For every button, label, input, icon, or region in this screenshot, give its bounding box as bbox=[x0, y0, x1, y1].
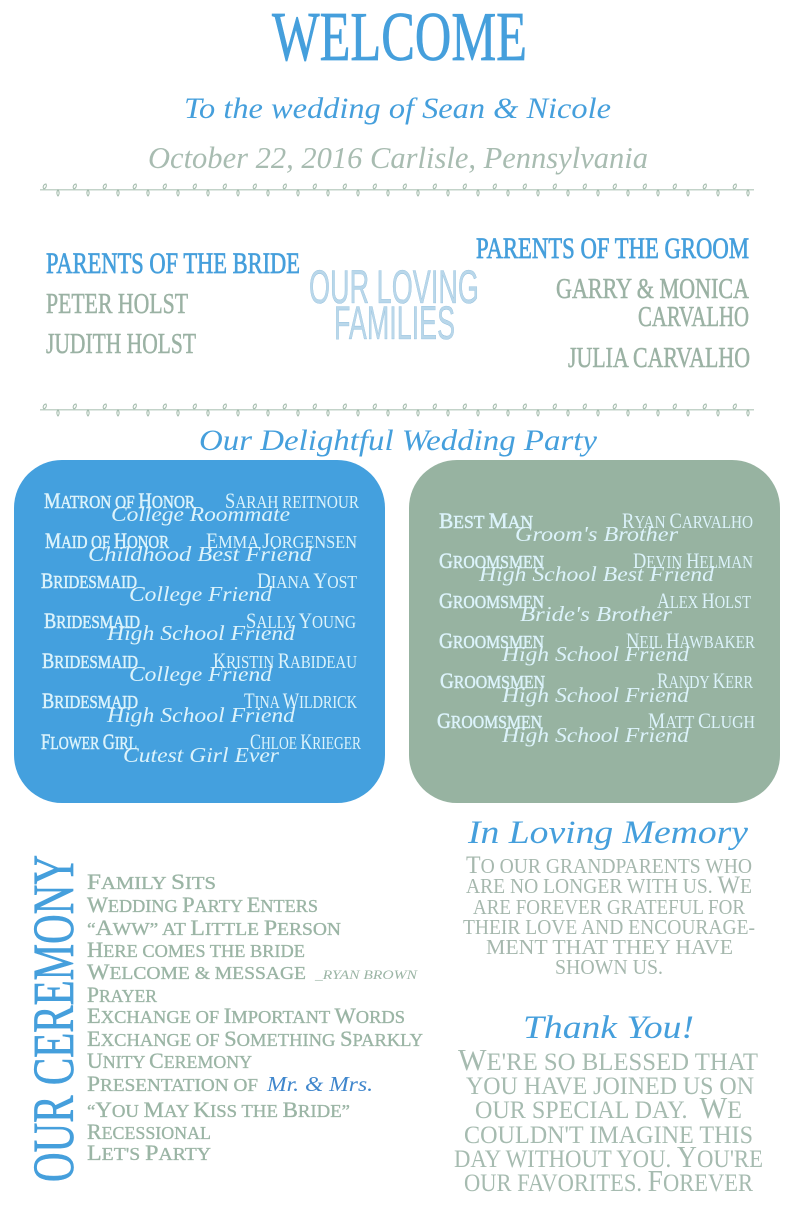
list: ceremony order: HERE COMES THE BRIDE bbox=[87, 937, 305, 962]
row: maid of honor: Childhood Best Friend bbox=[88, 542, 313, 566]
heading: our ceremony (vertical): OUR CEREMONY bbox=[21, 855, 86, 1182]
list: ceremony order: EXCHANGE OF SOMETHING SPARKLY bbox=[87, 1026, 423, 1051]
text block: thank you: OUR FAVORITES. FOREVER bbox=[464, 1164, 753, 1198]
date and place: October 22, 2016 Carlisle, Pennsylvania bbox=[148, 140, 648, 175]
panel: groomsmen bbox=[409, 460, 780, 803]
row: matron of honor: MATRON OF HONOR bbox=[44, 488, 195, 513]
list: ceremony order: WEDDING PARTY ENTERS bbox=[87, 892, 318, 917]
row: groomsman Randy Kerr: High School Friend bbox=[501, 683, 690, 707]
row: groomsman Matt Clugh bbox=[437, 708, 755, 747]
row: groomsman Devin Helman: GROOMSMEN bbox=[439, 548, 544, 573]
heading: our loving families: FAMILIES bbox=[334, 296, 455, 349]
list: ceremony order: PRAYER bbox=[87, 982, 157, 1007]
row: maid of honor: EMMA JORGENSEN bbox=[206, 528, 357, 553]
list: ceremony order bbox=[87, 869, 423, 1165]
row: matron of honor bbox=[44, 488, 359, 526]
text block: thank you: YOU HAVE JOINED US ON bbox=[466, 1073, 754, 1100]
row: groomsman Neil Hawbaker: NEIL HAWBAKER bbox=[626, 628, 755, 653]
row: groomsman Alex Holst bbox=[439, 588, 751, 626]
list: ceremony order: RECESSIONAL bbox=[87, 1119, 211, 1144]
row: groomsman Neil Hawbaker: GROOMSMEN bbox=[439, 628, 544, 653]
list: ceremony order: PRESENTATION OF bbox=[87, 1071, 258, 1096]
names: Garry and Monica Carvalho bbox=[556, 273, 749, 333]
row: groomsman Neil Hawbaker: High School Friend bbox=[501, 642, 690, 666]
heading: wedding party: Our Delightful Wedding Party bbox=[199, 424, 598, 457]
row: bridesmaid Tina Wildrick: BRIDESMAID bbox=[42, 688, 138, 713]
row: bridesmaid Kristin Rabideau: KRISTIN RABIDEAU bbox=[213, 648, 357, 673]
row: bridesmaid Kristin Rabideau: College Friend bbox=[129, 662, 273, 686]
row: best man bbox=[439, 508, 753, 546]
list: ceremony order: “AWW” AT LITTLE PERSON bbox=[87, 915, 341, 940]
vine divider: middle bbox=[40, 401, 754, 421]
row: bridesmaid Sally Young: High School Friend bbox=[106, 621, 296, 645]
row: matron of honor: SARAH REITNOUR bbox=[225, 488, 359, 513]
subtitle: couple: To the wedding of Sean & Nicole bbox=[184, 92, 611, 125]
row: groomsman Matt Clugh: MATT CLUGH bbox=[648, 708, 755, 733]
text block: thank you: COULDN'T IMAGINE THIS bbox=[464, 1122, 753, 1149]
list: ceremony order: Mr. & Mrs. bbox=[266, 1072, 373, 1096]
panel background: green bbox=[409, 460, 780, 803]
row: groomsman Alex Holst: Bride's Brother bbox=[520, 602, 673, 626]
names: Garry and Monica Carvalho: CARVALHO bbox=[638, 301, 749, 333]
list: ceremony order: EXCHANGE OF IMPORTANT WORDS bbox=[87, 1003, 405, 1028]
list: ceremony order: “YOU MAY KISS THE BRIDE” bbox=[87, 1097, 350, 1122]
text block: thank you: DAY WITHOUT YOU. YOU'RE bbox=[454, 1140, 763, 1174]
heading: our loving families bbox=[309, 260, 479, 349]
list: ceremony order: LET'S PARTY bbox=[87, 1140, 211, 1165]
text block: in loving memory: SHOWN US. bbox=[555, 955, 663, 979]
row: flower girl: Cutest Girl Ever bbox=[123, 743, 280, 767]
panel: parents of the bride bbox=[46, 247, 300, 360]
list: ceremony order: WELCOME & MESSAGE bbox=[87, 959, 306, 984]
row: bridesmaid Sally Young: BRIDESMAID bbox=[44, 608, 140, 633]
name: Judith Holst: JUDITH HOLST bbox=[46, 328, 196, 360]
row: best man: RYAN CARVALHO bbox=[622, 508, 753, 533]
row: bridesmaid Kristin Rabideau: BRIDESMAID bbox=[42, 648, 138, 673]
title: WELCOME bbox=[272, 0, 527, 76]
list: ceremony order: _RYAN BROWN bbox=[314, 967, 419, 982]
list: ceremony order: FAMILY SITS bbox=[87, 869, 216, 894]
row: bridesmaid Sally Young: SALLY YOUNG bbox=[246, 608, 356, 633]
panel: parents of the groom bbox=[476, 232, 750, 374]
heading: in loving memory: In Loving Memory bbox=[467, 815, 748, 851]
row: bridesmaid Diana Yost: College Friend bbox=[129, 582, 273, 606]
row: groomsman Devin Helman bbox=[439, 548, 753, 586]
row: bridesmaid Tina Wildrick: TINA WILDRICK bbox=[244, 688, 357, 713]
heading: thank you: Thank You! bbox=[523, 1010, 694, 1046]
row: groomsman Randy Kerr: RANDY KERR bbox=[657, 668, 753, 693]
row: groomsman Devin Helman: DEVIN HELMAN bbox=[633, 548, 753, 573]
row: best man: Groom's Brother bbox=[515, 522, 679, 546]
row: groomsman Randy Kerr bbox=[440, 668, 753, 707]
heading: our loving families: OUR LOVING bbox=[309, 260, 479, 313]
row: bridesmaid Diana Yost: BRIDESMAID bbox=[41, 568, 137, 593]
row: bridesmaid Tina Wildrick: High School Friend bbox=[106, 703, 296, 727]
row: bridesmaid Diana Yost: DIANA YOST bbox=[257, 568, 357, 593]
panel background: blue bbox=[14, 460, 385, 803]
row: groomsman Devin Helman: High School Best Friend bbox=[478, 562, 715, 586]
row: bridesmaid Sally Young bbox=[44, 608, 356, 645]
text block: thank you: WE'RE SO BLESSED THAT bbox=[458, 1043, 758, 1077]
row: bridesmaid Diana Yost bbox=[41, 568, 357, 606]
text block: in loving memory: THEIR LOVE AND ENCOURAGE- bbox=[463, 915, 755, 939]
row: flower girl: FLOWER GIRL bbox=[41, 729, 137, 754]
text block: in loving memory: ARE FOREVER GRATEFUL FOR bbox=[473, 895, 745, 919]
row: groomsman Randy Kerr: GROOMSMEN bbox=[440, 668, 545, 693]
text block: in loving memory: ARE NO LONGER WITH US. WE bbox=[466, 870, 752, 899]
name: Peter Holst: PETER HOLST bbox=[46, 288, 188, 320]
vine divider: top bbox=[40, 183, 754, 203]
text block: thank you bbox=[454, 1043, 763, 1198]
row: groomsman Alex Holst: ALEX HOLST bbox=[657, 588, 751, 613]
row: bridesmaid Kristin Rabideau bbox=[42, 648, 357, 686]
row: maid of honor bbox=[45, 528, 357, 566]
text block: in loving memory: MENT THAT THEY HAVE bbox=[486, 935, 733, 959]
row: flower girl bbox=[41, 729, 361, 767]
row: bridesmaid Tina Wildrick bbox=[42, 688, 357, 727]
text block: in loving memory bbox=[463, 850, 755, 979]
panel: bridesmaids bbox=[14, 460, 385, 803]
row: groomsman Alex Holst: GROOMSMEN bbox=[439, 588, 544, 613]
row: flower girl: CHLOE KRIEGER bbox=[250, 729, 361, 754]
row: best man: BEST MAN bbox=[439, 508, 533, 533]
row: maid of honor: MAID OF HONOR bbox=[45, 528, 169, 553]
row: groomsman Matt Clugh: GROOMSMEN bbox=[437, 708, 542, 733]
row: groomsman Matt Clugh: High School Friend bbox=[501, 723, 690, 747]
text block: thank you: OUR SPECIAL DAY. WE bbox=[475, 1091, 742, 1125]
row: matron of honor: College Roommate bbox=[111, 502, 290, 526]
text block: in loving memory: TO OUR GRANDPARENTS WHO bbox=[466, 850, 752, 879]
list: ceremony order: UNITY CEREMONY bbox=[87, 1048, 252, 1073]
row: groomsman Neil Hawbaker bbox=[439, 628, 755, 666]
heading: parents of the bride: PARENTS OF THE BRIDE bbox=[46, 247, 300, 280]
